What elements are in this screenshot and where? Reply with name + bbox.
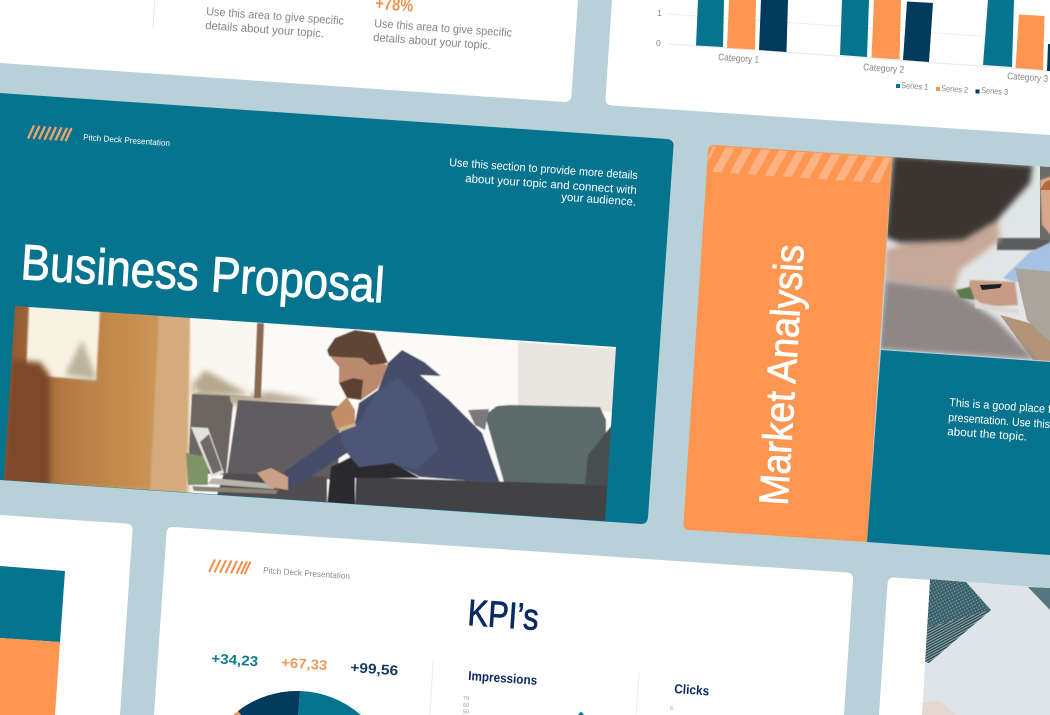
category labels: Category 2 <box>863 62 904 76</box>
panel: market analysis slide <box>683 145 1050 555</box>
legend: Series 3 <box>981 85 1009 97</box>
sofa back <box>227 400 340 480</box>
axis labels: 70 <box>463 696 469 702</box>
seated person back <box>885 213 1000 292</box>
stats: +67,33 <box>281 654 328 673</box>
axis labels <box>656 8 662 48</box>
text block: column two: Use this area to give specific <box>374 18 513 40</box>
hands <box>331 397 355 430</box>
head <box>329 355 388 400</box>
chart heading: impressions: Impressions <box>468 668 538 688</box>
window frame <box>254 323 264 398</box>
stripe band <box>708 146 891 183</box>
teal block <box>867 350 1050 555</box>
panel: KPI slide <box>154 527 853 715</box>
text block: intro: your audience. <box>561 192 636 209</box>
axis labels: 1 <box>657 8 662 18</box>
text block: intro: Use this section to provide more details <box>449 157 638 182</box>
text block: intro <box>449 157 638 209</box>
icon: header stripes <box>28 126 72 141</box>
panel: top-left text slide <box>0 0 578 102</box>
text block: column one: details about your topic. <box>205 20 324 40</box>
pie chart <box>233 691 361 715</box>
stats: +99,56 <box>350 659 399 678</box>
text block: description: about the topic. <box>947 426 1027 444</box>
text block: column two: details about your topic. <box>373 32 491 52</box>
sofa cushions <box>485 405 606 490</box>
bars: category 1 <box>696 0 788 52</box>
sofa arm <box>188 394 233 475</box>
axis labels: 0 <box>656 38 661 48</box>
wall <box>518 342 620 412</box>
axis labels <box>463 696 469 715</box>
text block: intro: about your topic and connect with <box>465 173 637 197</box>
photo: meeting <box>875 150 1050 365</box>
title: KPI's: KPI’s <box>466 592 540 638</box>
table <box>1000 315 1050 365</box>
label: pitch deck: Pitch Deck Presentation <box>263 565 351 581</box>
laptop <box>191 427 224 477</box>
label: pitch deck: Pitch Deck Presentation <box>83 132 171 148</box>
hoodie <box>284 350 500 490</box>
legend: Series 2 <box>941 83 969 95</box>
axis label: 6 <box>670 706 673 712</box>
chart heading: clicks: Clicks <box>674 681 710 698</box>
photo: skyscrapers <box>915 575 1050 715</box>
bars: category 2 <box>840 0 933 62</box>
panel: bottom-left colour block slide <box>0 515 133 715</box>
legend: Series 1 <box>901 80 929 92</box>
axis labels: 60 <box>463 703 469 709</box>
laptop <box>1015 268 1050 345</box>
stats <box>211 650 399 678</box>
chart peak <box>578 712 584 715</box>
title: market analysis: Market Analysis <box>751 243 813 507</box>
category labels <box>718 52 1048 85</box>
hands and phone <box>968 280 1018 307</box>
orange column <box>683 145 892 542</box>
bars: category 3 <box>983 0 1050 71</box>
stats: +34,23 <box>211 650 259 669</box>
photo: man on sofa with laptop <box>0 300 620 525</box>
sofa seat <box>216 473 327 505</box>
panel: business proposal slide <box>0 93 674 525</box>
panel: top-right bar chart slide <box>605 0 1050 135</box>
text block: column one: Use this area to give specific <box>206 6 345 28</box>
hills <box>190 380 318 408</box>
category labels: Category 1 <box>718 52 759 66</box>
warm left area <box>0 300 188 495</box>
pants <box>327 457 420 506</box>
icon: header stripes <box>209 560 250 574</box>
text block: column two <box>373 18 513 52</box>
person right <box>1040 175 1050 240</box>
title: Business Proposal <box>19 234 386 313</box>
panel: bottom-right building slide <box>879 575 1050 715</box>
mug <box>186 453 208 485</box>
legend <box>896 80 1009 97</box>
text block: column one <box>205 6 345 40</box>
text block: description <box>947 397 1050 444</box>
